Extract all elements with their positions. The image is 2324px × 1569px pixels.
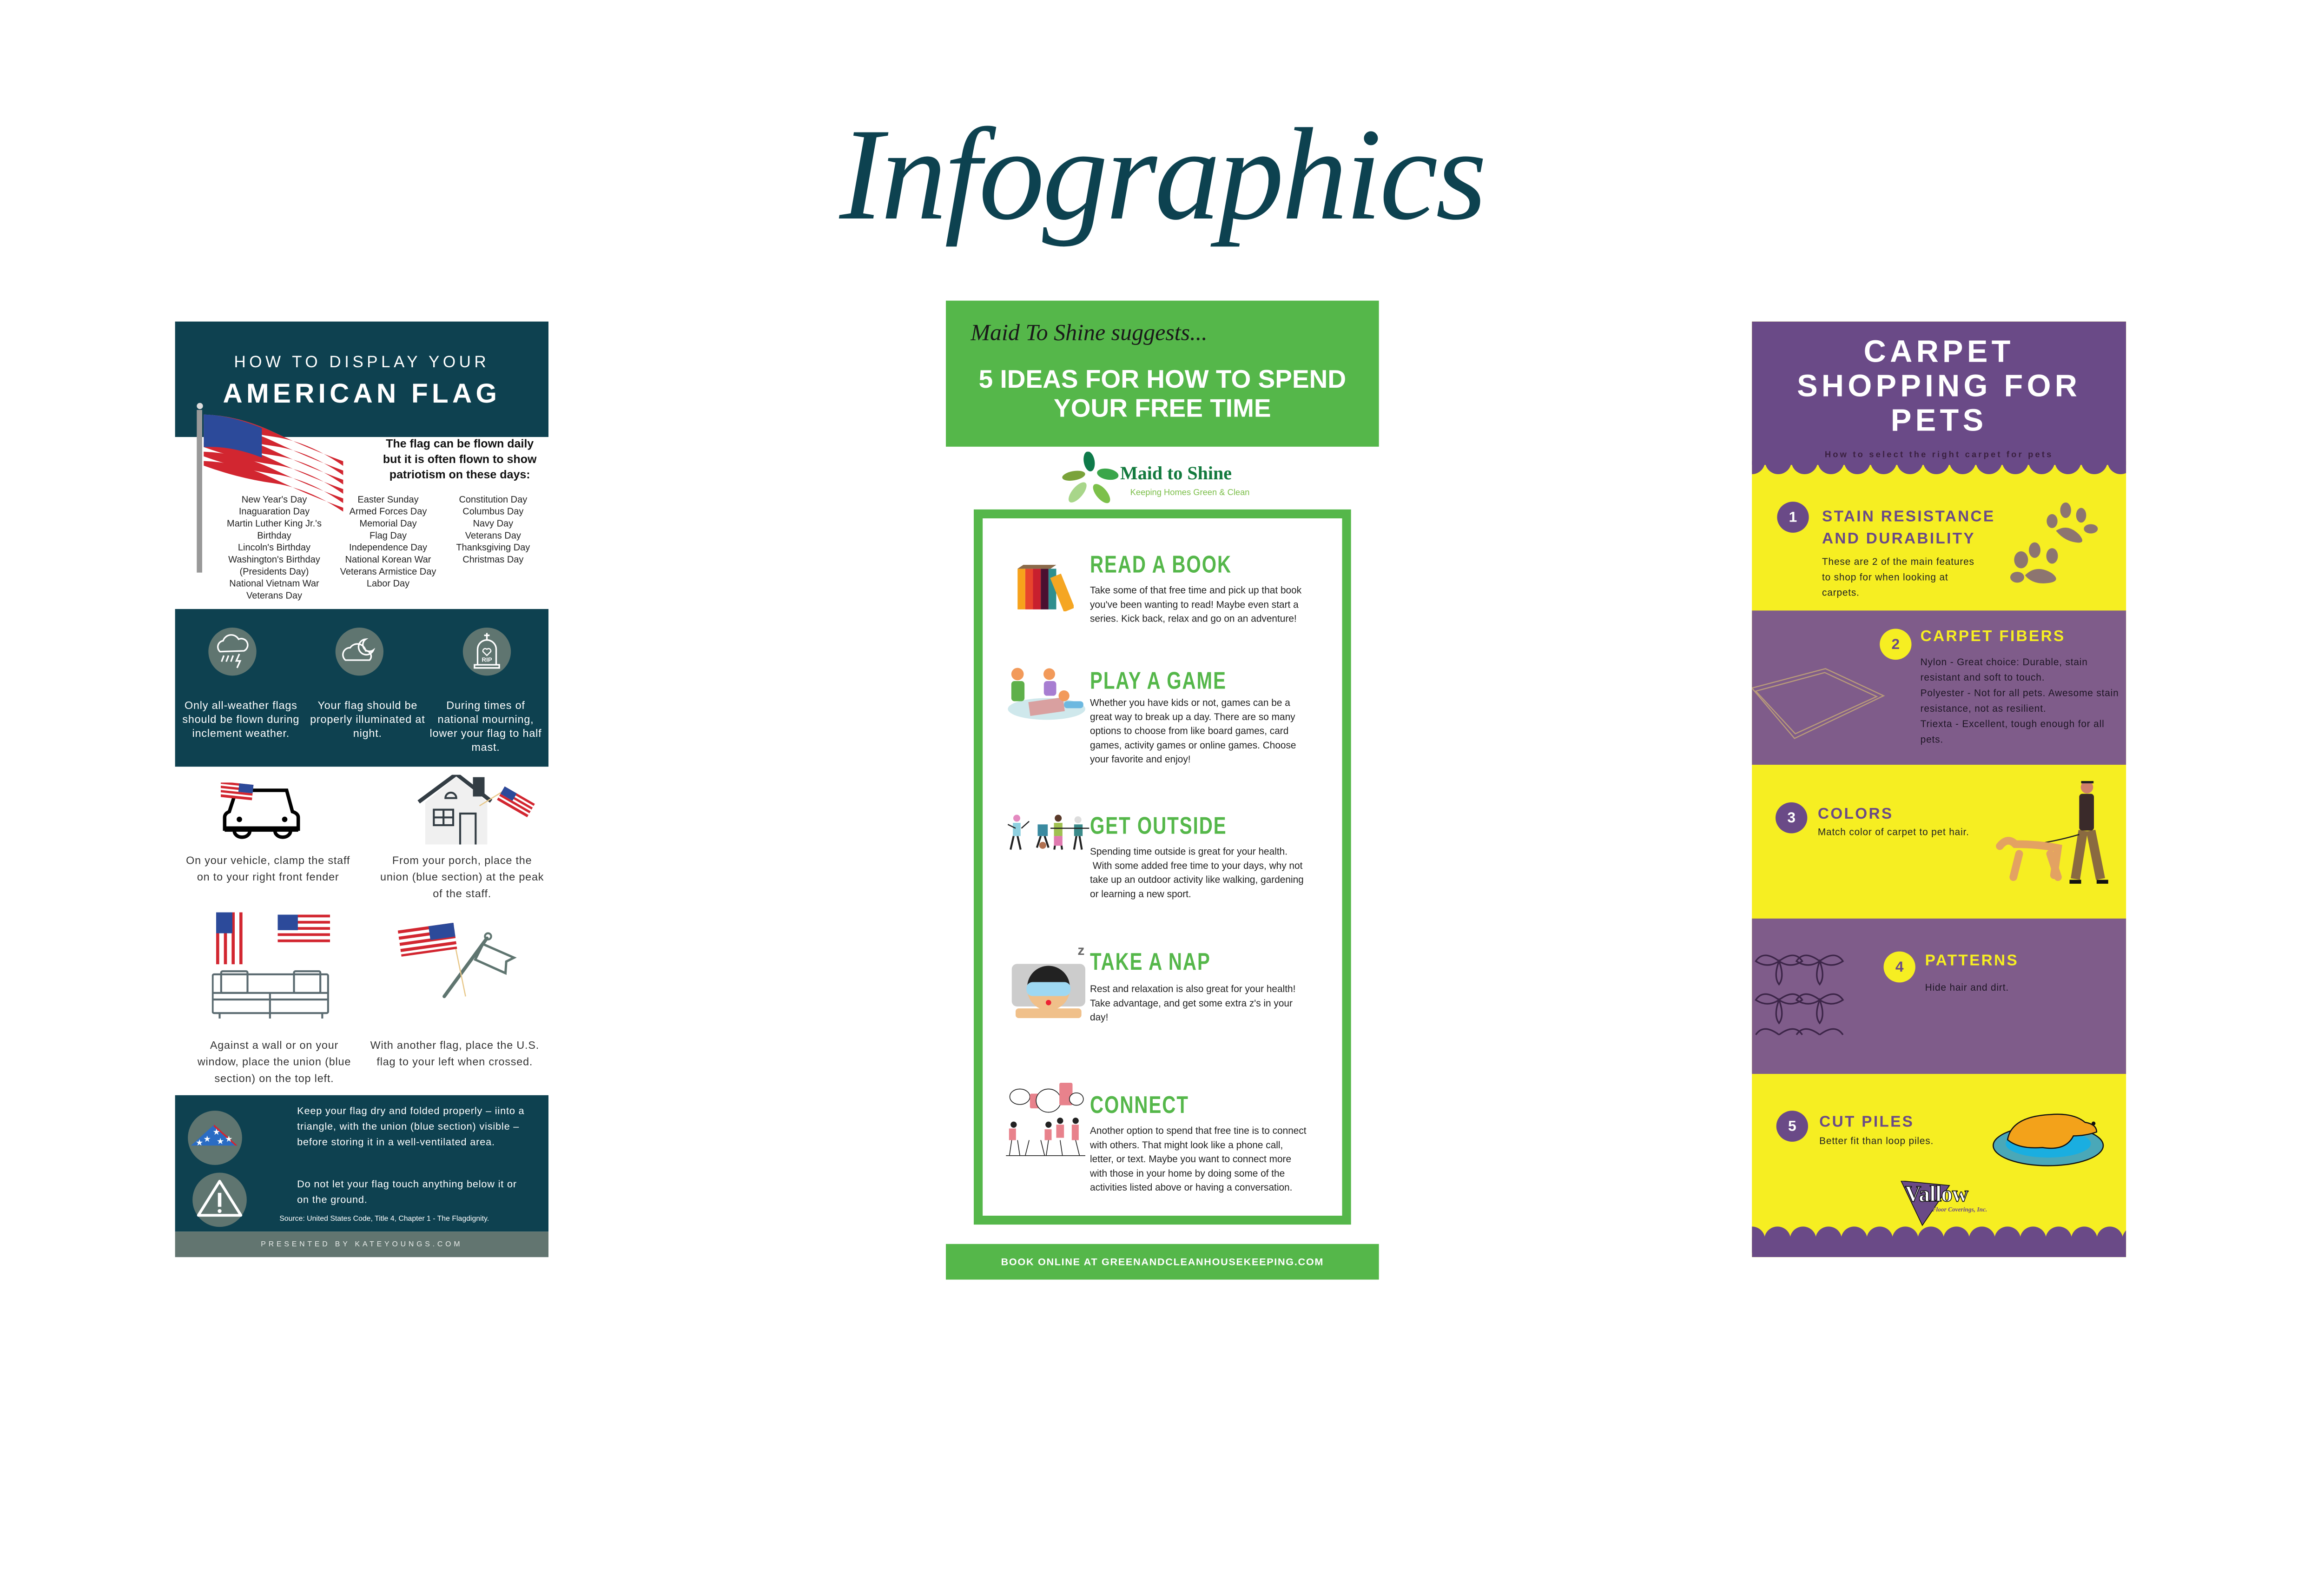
item: read [1006, 553, 1343, 638]
list col 3: Navy Day [473, 518, 513, 529]
icon: RIP [463, 628, 511, 675]
list col 1: Veterans Day [246, 590, 302, 601]
section 4: patterns [1752, 919, 2126, 1074]
number 2: 2 [1892, 636, 1900, 652]
icon: house with flag [417, 775, 541, 845]
subtitle: How to select the right carpet for pets [1825, 450, 2053, 459]
list col 1: Birthday [257, 530, 291, 541]
body: Spending time outside is great for your health. [1090, 846, 1287, 857]
icon: car with flag [221, 782, 310, 845]
green bordered list box [974, 510, 1351, 1225]
text: mourning: During times of national mourning, lower your flag to half mast. [430, 699, 541, 753]
panel: carpet for pets [1752, 322, 2126, 1257]
logo tagline: Keeping Homes Green & Clean [1130, 487, 1249, 497]
caption: porch: From your porch, place the union (blue section) at the peak of the staff. [380, 854, 544, 900]
text: fold: Keep your flag dry and folded properly – iinto a triangle, with the union (blue section) visible – before storing it in a well-ventilated area. [297, 1105, 524, 1147]
icon: folded flag: ★ [212, 1127, 220, 1137]
number 5: 5 [1788, 1118, 1796, 1134]
caption: crossed: With another flag, place the U.S. flag to your left when crossed. [370, 1039, 539, 1068]
item: game [1006, 669, 1343, 782]
header [946, 301, 1379, 447]
list col 2: Memorial Day [359, 518, 417, 529]
body: With some added free time to your days, why not take up an outdoor activity like walking, gardening or learning a new sport. [1090, 860, 1304, 900]
icon: books [1017, 565, 1074, 611]
heading: TAKE A NAP [1090, 948, 1211, 975]
logo: Vallow: Vallow [1905, 1181, 1968, 1206]
icon: sleeper: z [1074, 968, 1081, 984]
number 4 [1883, 952, 1915, 982]
list col 1: Washington's Birthday [228, 554, 320, 565]
panel: tips band [175, 609, 548, 767]
icon: dancers [1006, 813, 1093, 852]
logo name: Maid to Shine [1120, 463, 1232, 483]
title: PETS [1891, 403, 1987, 437]
footer bar: BOOK ONLINE AT GREENANDCLEANHOUSEKEEPING.COM [1001, 1256, 1324, 1268]
body: Another option to spend that free tine is to connect with others. That might look like a phone call, letter, or text. Maybe you want to connect more with those in your home by doing some of the activities listed above or having a conversation. [1090, 1125, 1307, 1193]
number 2 [1880, 629, 1911, 660]
text: weather: Only all-weather flags should be flown during inclement weather. [182, 699, 299, 739]
item: connect [1006, 1093, 1343, 1206]
title: CARPET [1864, 334, 2014, 368]
heading: STAIN RESISTANCE [1822, 508, 1995, 525]
number 5 [1776, 1111, 1808, 1142]
icon: pattern tile [1752, 946, 1851, 1046]
list col 3: Christmas Day [462, 554, 523, 565]
footer: PRESENTED BY KATEYOUNGS.COM [261, 1240, 462, 1248]
logo [1062, 452, 1263, 504]
icon: flag on pole [194, 403, 350, 573]
icon: folded flag: ★ [217, 1137, 224, 1146]
subtitle: HOW TO DISPLAY YOUR [234, 352, 489, 371]
body: Polyester - Not for all pets. Awesome stain resistance, not as resilient. [1921, 688, 2119, 714]
list col 1 [212, 494, 336, 602]
body: These are 2 of the main features to shop for when looking at carpets. [1822, 556, 1974, 598]
list col 1: (Presidents Day) [240, 566, 309, 577]
list col 2: Independence Day [349, 543, 427, 553]
panel: american flag [175, 322, 548, 1257]
title: SHOPPING FOR [1797, 368, 2081, 403]
list col 2: Labor Day [367, 578, 409, 589]
list col 1: Lincoln's Birthday [238, 543, 310, 553]
heading: 5 IDEAS FOR HOW TO SPEND [979, 364, 1346, 393]
icon: rug outline [1752, 661, 1891, 750]
section 2: carpet fibers [1752, 610, 2126, 765]
body: Rest and relaxation is also great for your health! Take advantage, and get some extra z's in your day! [1090, 984, 1295, 1023]
logo: Vallow: Floor Coverings, Inc. [1932, 1206, 1987, 1213]
icon: people talking [1006, 1082, 1087, 1158]
heading: AND DURABILITY [1822, 530, 1975, 547]
heading: CONNECT [1090, 1092, 1189, 1119]
heading: PATTERNS [1925, 952, 2019, 969]
heading [946, 364, 1379, 423]
icon: dog walker [1992, 780, 2108, 889]
footer bar [946, 1244, 1379, 1279]
list col 2 [326, 494, 450, 589]
number 1: 1 [1789, 509, 1797, 525]
icon: warning [192, 1172, 247, 1227]
script intro: Maid To Shine suggests... [971, 319, 1208, 345]
icon: sleeper [1012, 947, 1089, 1022]
icon: dog on bed [1992, 1105, 2108, 1169]
caption: wall: Against a wall or on your window, place the union (blue section) on the top left. [198, 1039, 351, 1084]
text: flown days intro: The flag can be flown daily but it is often flown to show patriotism on these days: [383, 437, 536, 481]
item: nap [1006, 950, 1343, 1043]
section 1: stain resistance [1752, 475, 2126, 610]
body: Nylon - Great choice: Durable, stain resistant and soft to touch. [1921, 656, 2088, 683]
body [1921, 654, 2122, 747]
heading: PLAY A GAME [1090, 668, 1227, 694]
icon: folded flag: ★ [196, 1138, 203, 1148]
icon: paw prints [2009, 502, 2102, 593]
icon: folded flag: ★ [203, 1134, 211, 1144]
panel: free time ideas [946, 301, 1379, 1279]
icon: RIP: RIP [482, 656, 492, 663]
caption: vehicle: On your vehicle, clamp the staff on to your right front fender [186, 854, 350, 883]
icon: moon cloud [336, 628, 383, 675]
number 4: 4 [1895, 959, 1903, 975]
heading: READ A BOOK [1090, 551, 1232, 578]
list col 2: Armed Forces Day [350, 506, 427, 517]
heading: CUT PILES [1819, 1113, 1914, 1130]
icon: crossed flags [398, 923, 518, 998]
number 1 [1777, 502, 1809, 533]
list col 1: National Vietnam War [229, 578, 319, 589]
list col 1: New Year's Day [242, 494, 307, 505]
body: Triexta - Excellent, tough enough for all pets. [1921, 719, 2105, 745]
list col 3 [431, 494, 555, 566]
body: Better fit than loop piles. [1819, 1135, 1934, 1146]
number 3: 3 [1787, 810, 1796, 826]
icon: storm [208, 628, 257, 675]
heading: YOUR FREE TIME [1054, 394, 1271, 422]
title: Infographics [839, 101, 1485, 247]
list col 1: Inaguaration Day [239, 506, 310, 517]
header [1752, 322, 2126, 465]
text: source: Source: United States Code, Title 4, Chapter 1 - The Flagdignity. [279, 1214, 489, 1223]
list col 3: Thanksgiving Day [456, 543, 530, 553]
body [1090, 845, 1307, 901]
list col 2: Flag Day [370, 530, 407, 541]
list col 3: Veterans Day [465, 530, 521, 541]
icon: wall flags and sofa [212, 912, 330, 1028]
item: outside [1006, 814, 1343, 907]
logo: Vallow [1899, 1181, 2011, 1227]
section 3: colors [1752, 765, 2126, 919]
body: Match color of carpet to pet hair. [1818, 827, 1969, 838]
number 3 [1776, 802, 1807, 833]
icon: folded flag: ★ [225, 1134, 233, 1144]
heading: AMERICAN FLAG [223, 378, 501, 408]
list col 3: Constitution Day [459, 494, 527, 505]
text: night: Your flag should be properly illuminated at night. [310, 699, 425, 739]
icon: kids playing [1006, 666, 1087, 722]
footer [175, 1231, 548, 1257]
section 5: cut piles [1752, 1074, 2126, 1257]
heading [1822, 505, 1995, 549]
list col 3: Columbus Day [462, 506, 523, 517]
title [1752, 334, 2126, 437]
text: ground: Do not let your flag touch anything below it or on the ground. [297, 1178, 517, 1205]
body: Whether you have kids or not, games can be a great way to break up a day. There are so many options to choose from like board games, card games, activity games or online games. Choose your favorite and enjoy! [1090, 697, 1296, 765]
header [175, 322, 548, 437]
heading: GET OUTSIDE [1090, 812, 1227, 839]
list col 2: National Korean War [345, 554, 431, 565]
list col 2: Easter Sunday [357, 494, 419, 505]
body: Hide hair and dirt. [1925, 982, 2009, 993]
body: Take some of that free time and pick up that book you've been wanting to read! Maybe even start a series. Kick back, relax and go on an adventure! [1090, 585, 1301, 624]
heading: COLORS [1818, 805, 1893, 822]
list col 2: Veterans Armistice Day [340, 566, 436, 577]
icon: folded flag [188, 1111, 242, 1165]
heading: CARPET FIBERS [1921, 628, 2066, 645]
list col 1: Martin Luther King Jr.'s [227, 518, 322, 529]
panel: care band [175, 1095, 548, 1231]
